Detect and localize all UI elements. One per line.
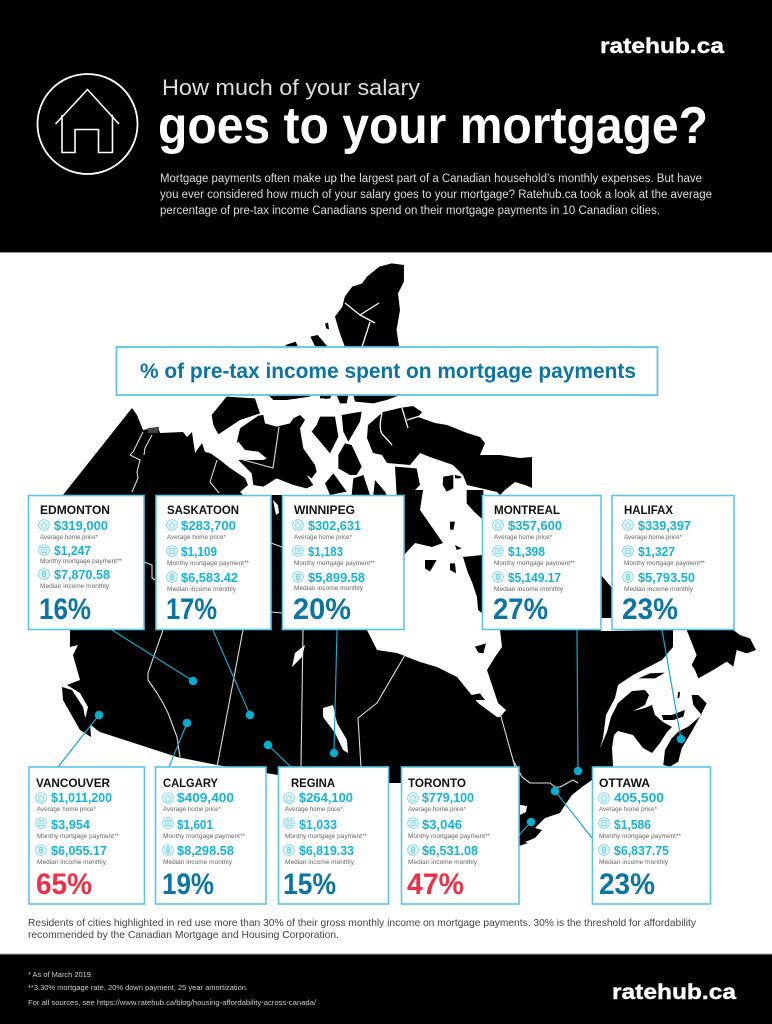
mortgage payment: Monthy mortgage payment**	[294, 560, 375, 567]
median income	[408, 844, 478, 866]
home price: $357,600	[508, 519, 562, 533]
panel: Montreal: MONTREAL	[494, 505, 560, 517]
median income: Median income monthly	[408, 859, 478, 866]
median income: Median income monthly	[294, 585, 364, 592]
home price: Average home price*	[37, 806, 96, 813]
mortgage payment: $1,398	[508, 545, 545, 559]
heading line 1: How much of your salary	[162, 75, 420, 100]
map of Canada	[62, 263, 756, 846]
panel: Winnipeg	[282, 496, 404, 630]
mortgage payment	[623, 545, 705, 567]
panel: Edmonton: EDMONTON	[40, 505, 110, 517]
mortgage payment: $3,046	[422, 818, 462, 832]
median income: Median income monthly	[40, 583, 110, 590]
Vancouver Island	[62, 687, 91, 737]
percentage: 23%	[622, 593, 678, 626]
Ellesmere Island	[286, 263, 404, 347]
median income: $6,819.33	[299, 844, 354, 858]
home price: $264,100	[299, 791, 353, 805]
home price: Average home price*	[294, 534, 352, 541]
mortgage payment	[599, 818, 681, 840]
median income: Median income monthly	[494, 586, 564, 593]
home price: 405,500	[614, 791, 664, 805]
mortgage payment: $1,247	[54, 544, 91, 558]
Arctic islands east and Baffin	[312, 395, 462, 495]
mortgage payment: Monthy mortgage payment**	[37, 833, 119, 840]
median income	[163, 844, 234, 866]
panel: Vancouver	[29, 767, 144, 904]
mortgage payment: Monthy mortgage payment**	[40, 558, 122, 565]
mortgage payment: $1,033	[299, 818, 337, 832]
intro paragraph	[160, 173, 712, 217]
median income: Median income monthly	[624, 586, 694, 593]
logo: ratehub.ca: ratehub.ca	[600, 35, 724, 58]
median income: Median income monthly	[163, 859, 233, 866]
home price: $302,631	[308, 519, 361, 533]
panel: Montreal	[482, 496, 601, 630]
home price	[163, 791, 234, 813]
mortgage payment: Monthy mortgage payment**	[624, 560, 705, 567]
median income	[599, 844, 669, 866]
mortgage payment: $1,183	[308, 545, 343, 559]
median income: $5,149.17	[508, 571, 561, 585]
panel: Ottawa: OTTAWA	[599, 778, 650, 790]
home price	[408, 791, 474, 813]
median income: Median income monthly	[37, 859, 107, 866]
home price: $319,000	[54, 519, 108, 533]
home price: $1,011,200	[51, 791, 112, 805]
percentage: 20%	[293, 593, 351, 626]
mortgage payment: Monthy mortgage payment**	[408, 833, 490, 840]
home price: Average home price*	[167, 534, 226, 541]
mortgage payment: $1,109	[181, 545, 217, 559]
mortgage payment: $1,601	[177, 818, 213, 832]
median income: $8,298.58	[177, 844, 234, 858]
home price	[599, 791, 664, 813]
inland waters	[273, 408, 527, 842]
mortgage payment	[167, 545, 249, 567]
icon: house in circle	[38, 74, 138, 174]
mortgage payment: $1,327	[638, 545, 675, 559]
mortgage payment	[284, 818, 367, 840]
affordability note: Residents of cities highlighted in red use more than 30% of their gross monthly income on mortgage payments. 30% is the threshold for affordability	[28, 917, 697, 929]
mortgage payment: Monthy mortgage payment**	[494, 560, 575, 567]
panel: Regina	[278, 767, 388, 904]
panel: Regina: REGINA	[291, 778, 335, 790]
footnotes	[28, 970, 317, 1007]
mortgage payment	[493, 545, 575, 567]
percentage: 19%	[162, 868, 214, 901]
Quebec islands and Atlantic provinces	[638, 630, 756, 767]
panel: Calgary: CALGARY	[163, 778, 218, 790]
median income: $6,837.75	[614, 844, 669, 858]
mortgage payment: Monthy mortgage payment**	[163, 833, 245, 840]
mortgage payment	[39, 544, 122, 565]
mortgage payment: $3,954	[51, 818, 90, 832]
panel: Edmonton	[28, 496, 144, 630]
footer band	[0, 954, 772, 1024]
median income: $5,793.50	[638, 571, 695, 585]
panel: Calgary	[156, 767, 266, 904]
home price	[493, 519, 562, 541]
percentage: 17%	[166, 593, 217, 626]
main title: goes to your mortgage?	[158, 97, 708, 155]
mortgage payment: $1,586	[614, 818, 651, 832]
home price	[167, 519, 236, 541]
footnotes: * As of March 2019.	[28, 970, 93, 979]
home price	[623, 519, 691, 541]
mortgage payment	[293, 545, 375, 567]
home price: $409,400	[177, 791, 234, 805]
mortgage payment: Monthy mortgage payment**	[167, 560, 249, 567]
panel: Ottawa	[592, 767, 710, 904]
panel: Halifax: HALIFAX	[624, 505, 673, 517]
median income: $7,870.58	[54, 568, 110, 582]
home price	[39, 519, 108, 541]
footnotes: For all sources, see https://www.ratehub.ca/blog/housing-affordability-across-canada/	[28, 998, 317, 1007]
affordability note	[28, 917, 697, 941]
intro paragraph: Mortgage payments often make up the largest part of a Canadian household’s monthly expenses. But have	[160, 173, 702, 185]
home price	[284, 791, 353, 813]
home price: Average home price*	[163, 806, 221, 813]
panel: Vancouver: VANCOUVER	[36, 778, 111, 790]
home price: Average home price*	[40, 534, 98, 541]
percentage: 27%	[493, 593, 548, 626]
Arctic islands west	[212, 395, 330, 488]
home price: Average home price*	[599, 806, 657, 813]
home price	[36, 791, 112, 813]
intro paragraph: percentage of pre-tax income Canadians spend on their mortgage payments in 10 Canadian cities.	[160, 205, 660, 217]
median income	[493, 571, 564, 593]
median income	[167, 571, 238, 593]
mortgage payment: Monthy mortgage payment**	[285, 833, 367, 840]
median income: Median income monthly	[285, 859, 355, 866]
footer logo: ratehub.ca	[612, 981, 736, 1004]
panel: Saskatoon: SASKATOON	[167, 505, 239, 517]
panel: Toronto: TORONTO	[408, 778, 466, 790]
percentage: 47%	[407, 868, 464, 901]
home price: Average home price*	[285, 806, 343, 813]
home price: $339,397	[638, 519, 691, 533]
percentage: 15%	[283, 868, 336, 901]
percentage: 65%	[36, 868, 92, 901]
panel: Winnipeg: WINNIPEG	[294, 505, 355, 517]
median income	[293, 571, 365, 592]
median income: Median income monthly	[167, 586, 237, 593]
median income: Median income monthly	[599, 859, 669, 866]
home price: Average home price*	[624, 534, 682, 541]
mortgage payment	[36, 818, 119, 840]
median income: $6,583.42	[181, 571, 238, 585]
panel: Halifax	[612, 496, 734, 630]
Hudson Bay islands	[425, 490, 486, 700]
median income	[623, 571, 695, 593]
home price: Average home price*	[408, 806, 466, 813]
chart title box: % of pre-tax income spent on mortgage payments	[140, 360, 636, 383]
percentage: 16%	[39, 593, 91, 626]
mortgage payment	[408, 818, 490, 840]
median income	[284, 844, 355, 866]
provincial borders	[130, 427, 578, 787]
home price: $283,700	[181, 519, 236, 533]
median income: $6,531.08	[422, 844, 478, 858]
header band	[0, 0, 772, 253]
median income: $6,055.17	[51, 844, 107, 858]
home price: $779,100	[422, 791, 474, 805]
home price	[293, 519, 361, 541]
affordability note: recommended by the Canadian Mortgage and Housing Corporation.	[28, 929, 339, 941]
chart title box	[116, 347, 658, 395]
panel: Saskatoon	[156, 496, 271, 630]
median income: $5,899.58	[308, 571, 365, 585]
connector lines and city dots	[58, 630, 685, 838]
intro paragraph: you ever considered how much of your salary goes to your mortgage? Ratehub.ca took a look at the average	[160, 189, 712, 201]
percentage: 23%	[599, 868, 655, 901]
footnotes: **3.30% mortgage rate, 20% down payment, 25 year amortization.	[28, 983, 248, 992]
mortgage payment	[163, 818, 245, 840]
panel: Toronto	[402, 767, 519, 904]
median income	[39, 568, 110, 590]
home price: Average home price*	[494, 534, 552, 541]
mortgage payment: Monthy mortgage payment**	[599, 833, 681, 840]
median income	[36, 844, 107, 866]
